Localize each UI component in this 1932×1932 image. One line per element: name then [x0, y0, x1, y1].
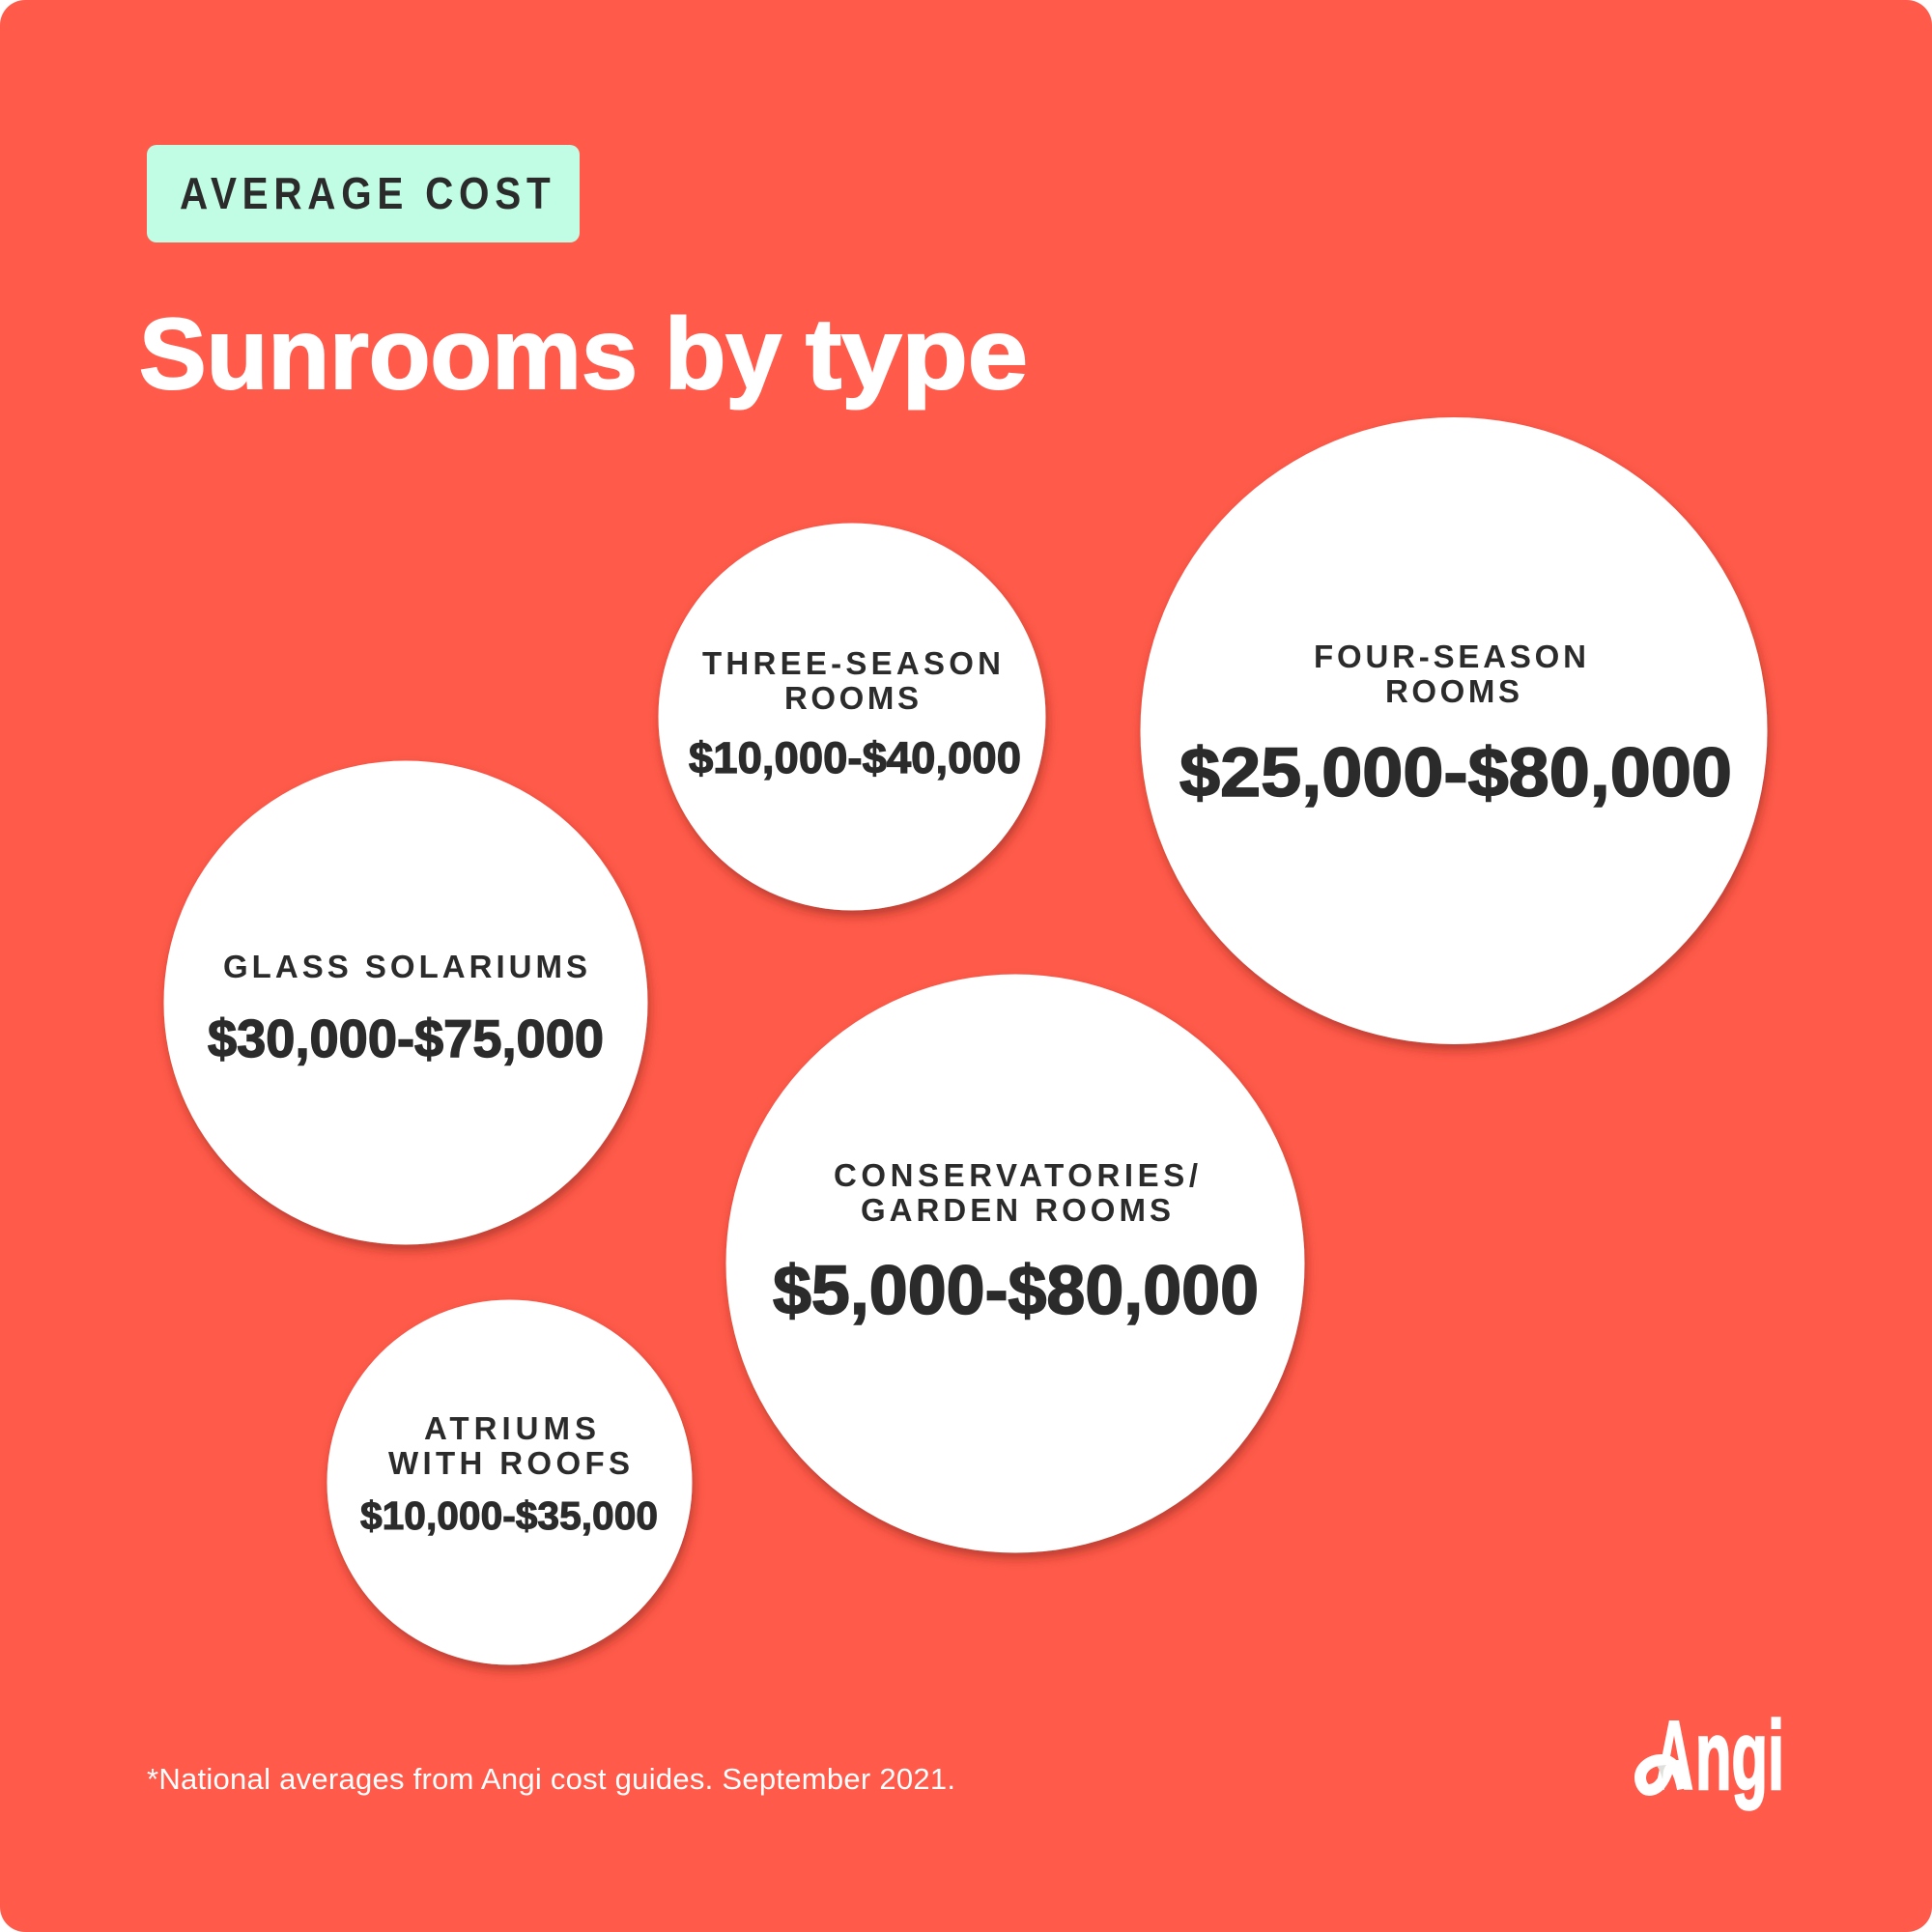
- circle: atriums: [327, 1300, 692, 1665]
- logo: Angi: [1640, 1702, 1784, 1810]
- footnote: *National averages from Angi cost guides. September 2021.: [147, 1762, 955, 1796]
- tag: average cost: [147, 145, 580, 242]
- panel: four-season rooms: [1140, 417, 1768, 1044]
- title: by: [665, 298, 781, 411]
- label: three-season rooms: THREE-SEASON: [702, 645, 1001, 681]
- label: conservatories / garden rooms: [834, 1157, 1198, 1228]
- panel: three-season rooms: [659, 524, 1045, 910]
- price: four-season rooms: $25,000-$80,000: [1179, 735, 1732, 811]
- tag: average cost: AVERAGE COST: [180, 170, 551, 219]
- label: four-season rooms: FOUR-SEASON: [1314, 639, 1586, 674]
- panel: atriums with roofs: [327, 1300, 692, 1665]
- label: glass solariums: GLASS SOLARIUMS: [223, 949, 587, 984]
- title: Sunrooms: [139, 298, 638, 411]
- panel: conservatories / garden rooms: [726, 974, 1304, 1553]
- title: [139, 298, 1028, 411]
- price: glass solariums: $30,000-$75,000: [208, 1009, 604, 1068]
- logo: Angi: A: [1655, 1702, 1693, 1810]
- price: three-season rooms: $10,000-$40,000: [689, 733, 1021, 782]
- circle: glass solariums: [164, 761, 647, 1244]
- label: atriums with roofs: WITH ROOFS: [388, 1445, 630, 1481]
- panel: glass solariums: [164, 761, 647, 1244]
- label: four-season rooms: ROOMS: [1385, 673, 1520, 709]
- price: conservatories: $5,000-$80,000: [773, 1253, 1259, 1329]
- label: conservatories / garden rooms: GARDEN ROOMS: [861, 1192, 1171, 1228]
- circle: conservatories: [726, 974, 1304, 1553]
- title: type: [806, 298, 1028, 411]
- label: atriums with roofs: [388, 1410, 630, 1481]
- label: conservatories / garden rooms: CONSERVATORIES/: [834, 1157, 1198, 1193]
- label: four-season rooms: [1314, 639, 1586, 709]
- logo: Angi: ngi: [1695, 1702, 1784, 1810]
- label: three-season rooms: [702, 645, 1001, 716]
- label: atriums with roofs: ATRIUMS: [424, 1410, 596, 1446]
- circle: three-season: [659, 524, 1045, 910]
- price: atriums with roofs: $10,000-$35,000: [360, 1493, 658, 1538]
- circle: four-season: [1140, 417, 1768, 1044]
- label: three-season rooms: ROOMS: [784, 680, 919, 716]
